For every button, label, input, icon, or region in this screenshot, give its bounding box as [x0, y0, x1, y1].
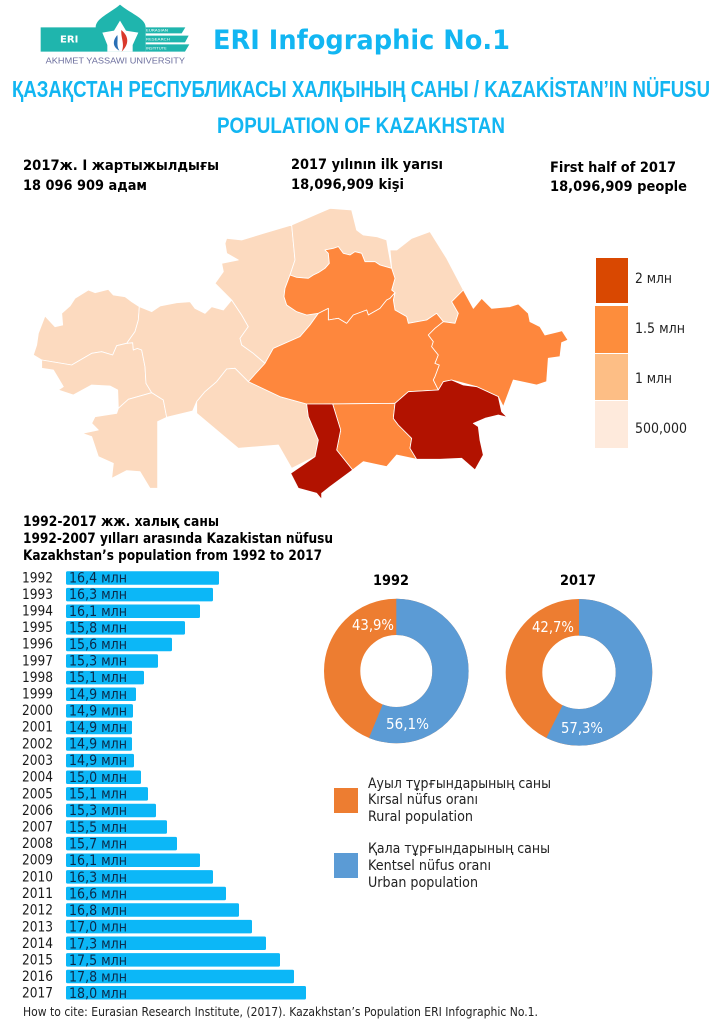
- bar 1994: [22, 604, 200, 620]
- region: Karaganda: [248, 293, 443, 404]
- donut chart: 2017: 57,3%: [561, 719, 603, 737]
- region: Kostanay: [215, 225, 318, 363]
- bar 1997: 15,3 млн: [69, 654, 127, 670]
- text block: Kazakh population: [23, 158, 219, 194]
- region: West Kazakhstan: [33, 289, 139, 365]
- bar 2010: 16,3 млн: [69, 870, 127, 886]
- bar 2008: 2008: [22, 836, 53, 852]
- region: Akmola: [284, 247, 395, 323]
- bar 2007: 15,5 млн: [69, 820, 127, 836]
- bar 2014: 2014: [22, 936, 53, 952]
- bar chart heading: 1992-2017 жж. халық саны: [23, 514, 219, 530]
- bar 2005: 15,1 млн: [69, 787, 127, 803]
- bar 2003: 14,9 млн: [69, 753, 127, 769]
- legend: 1.5 million: 1.5 млн: [635, 321, 685, 337]
- text block: Turkish population: 2017 yılının ilk yarısı: [291, 157, 443, 173]
- donut chart: 1992: 43,9%: [352, 616, 394, 634]
- donut chart: 1992: 1992: [373, 573, 409, 589]
- bar 2012: [22, 903, 239, 919]
- bar 2017: 2017: [22, 986, 53, 1002]
- logo: Eurasian Research Institute: [41, 5, 189, 65]
- region: Atyrau: [42, 343, 152, 408]
- bar 1993: [22, 587, 213, 603]
- bar 2012: 16,8 млн: [69, 903, 127, 919]
- region: Aktobe: [127, 300, 265, 417]
- bar 1999: 14,9 млн: [69, 687, 127, 703]
- bar 1994: 1994: [22, 604, 53, 620]
- bar 2017: 18,0 млн: [69, 986, 127, 1002]
- legend: urban population: Қала тұрғындарының саны: [368, 841, 550, 857]
- text block: English population: First half of 2017: [550, 160, 676, 176]
- bar 2001: 14,9 млн: [69, 720, 127, 736]
- bar chart heading: 1992-2007 yılları arasında Kazakistan nüfusu: [23, 531, 333, 547]
- bar 2000: [22, 703, 133, 719]
- legend: rural population: Rural population: [368, 809, 473, 825]
- region: Zhambyl: [333, 403, 417, 470]
- legend: rural population: Ауыл тұрғындарының саны: [368, 776, 551, 792]
- bar 1992: [22, 570, 219, 587]
- bar chart: population by year: [22, 570, 306, 1002]
- bar 2002: 14,9 млн: [69, 737, 127, 753]
- bar 2000: 2000: [22, 703, 53, 719]
- bar 1995: [22, 620, 185, 636]
- bar 2005: 2005: [22, 786, 53, 802]
- bar 1995: 1995: [22, 620, 53, 636]
- bar 2010: [22, 870, 213, 886]
- bar 2002: [22, 736, 132, 753]
- bar 2015: 2015: [22, 953, 53, 969]
- donut chart: 2017: [524, 573, 634, 737]
- logo: Eurasian Research Institute: EURASIAN: [146, 29, 169, 33]
- legend: 2 million: [596, 258, 672, 303]
- bar chart heading: [23, 514, 333, 564]
- region: East Kazakhstan: [428, 290, 568, 407]
- bar 2005: [22, 786, 148, 803]
- bar 2008: 15,7 млн: [69, 836, 127, 852]
- logo: Eurasian Research Institute: AKHMET YASSAWI UNIVERSITY: [46, 55, 185, 65]
- donut chart: 1992: [342, 573, 450, 733]
- bar 2004: 2004: [22, 770, 53, 786]
- bar 2006: 15,3 млн: [69, 803, 127, 819]
- text block: Turkish population: [291, 157, 443, 193]
- region: Pavlodar: [390, 232, 463, 323]
- bar 2007: 2007: [22, 820, 53, 836]
- logo: Eurasian Research Institute: ERI: [60, 35, 78, 46]
- title: ERI Infographic No.1: [213, 25, 510, 56]
- bar 1997: 1997: [22, 653, 53, 669]
- bar 1992: 1992: [22, 570, 53, 586]
- region: Almaty: [393, 380, 507, 470]
- region: Mangystau: [82, 393, 167, 488]
- bar 2016: [22, 969, 294, 986]
- bar 1998: 15,1 млн: [69, 670, 127, 686]
- logo: Eurasian Research Institute: RESEARCH: [146, 38, 171, 42]
- bar chart heading: Kazakhstan’s population from 1992 to 2017: [23, 548, 322, 564]
- citation footer: How to cite: Eurasian Research Institute, (2017). Kazakhstan’s Population ERI Infographic No.1.: [23, 1005, 538, 1019]
- bar 2015: [22, 953, 280, 969]
- bar 2001: 2001: [22, 720, 53, 736]
- bar 2002: 2002: [22, 736, 53, 752]
- legend: urban population: Kentsel nüfus oranı: [368, 858, 491, 874]
- region: South Kazakhstan: [291, 404, 353, 499]
- legend: 500,000: [595, 401, 687, 448]
- text block: Kazakh population: 2017ж. I жартыжылдығы: [23, 158, 219, 174]
- bar 2011: 2011: [22, 886, 53, 902]
- donut chart: 2017: 42,7%: [532, 618, 574, 636]
- text block: Turkish population: 18,096,909 kişi: [291, 177, 404, 193]
- bar 1999: 1999: [22, 686, 53, 702]
- text block: English population: 18,096,909 people: [550, 179, 687, 195]
- donut chart: 2017: 2017: [560, 573, 596, 589]
- legend: urban population: [334, 841, 550, 891]
- legend: 2 million: 2 млн: [635, 271, 672, 287]
- bar 1996: 15,6 млн: [69, 637, 127, 653]
- bar 1996: [22, 637, 172, 653]
- bar 2003: 2003: [22, 753, 53, 769]
- legend: 500,000: 500,000: [635, 421, 687, 437]
- choropleth map of Kazakhstan: [33, 208, 568, 499]
- bar 2006: 2006: [22, 803, 53, 819]
- bar 2014: 17,3 млн: [69, 936, 127, 952]
- bar 1999: [22, 686, 136, 703]
- bar 2008: [22, 836, 177, 852]
- bar 2000: 14,9 млн: [69, 703, 127, 719]
- bar 2013: 2013: [22, 919, 53, 935]
- legend: 1 million: 1 млн: [635, 371, 672, 387]
- bar 2011: 16,6 млн: [69, 886, 127, 902]
- bar 1993: 1993: [22, 587, 53, 603]
- bar 2009: 2009: [22, 853, 53, 869]
- map legend: [595, 258, 687, 448]
- logo: Eurasian Research Institute: INSTITUTE: [146, 47, 167, 51]
- bar 2001: [22, 720, 132, 736]
- legend: 1 million: [595, 354, 672, 400]
- bar 2017: [22, 986, 306, 1002]
- bar 2007: [22, 820, 167, 836]
- bar 1997: [22, 653, 158, 670]
- bar 2011: [22, 886, 226, 902]
- bar 2003: [22, 753, 134, 769]
- region: North Kazakhstan: [290, 208, 392, 278]
- bar 2006: [22, 803, 156, 819]
- bar 1994: 16,1 млн: [69, 604, 127, 620]
- bar 2013: 17,0 млн: [69, 920, 127, 936]
- bar 2014: [22, 936, 266, 952]
- legend: 1.5 million: [595, 306, 685, 353]
- bar 1996: 1996: [22, 637, 53, 653]
- bar 1998: 1998: [22, 670, 53, 686]
- bar 1992: 16,4 млн: [69, 571, 127, 587]
- bar 2015: 17,5 млн: [69, 953, 127, 969]
- bar 2016: 2016: [22, 969, 53, 985]
- bar 2016: 17,8 млн: [69, 970, 127, 986]
- donut chart: 1992: 56,1%: [386, 715, 429, 733]
- region: Kyzylorda: [197, 368, 318, 468]
- bar 2010: 2010: [22, 870, 53, 886]
- text block: English population: [550, 160, 687, 195]
- text block: Kazakh population: 18 096 909 адам: [23, 178, 147, 194]
- bar 2012: 2012: [22, 903, 53, 919]
- bar 2004: [22, 770, 141, 786]
- legend: urban population: Urban population: [368, 875, 478, 891]
- bar 2013: [22, 919, 252, 936]
- bar 1995: 15,8 млн: [69, 620, 127, 636]
- bar 2009: [22, 853, 200, 869]
- bar 1998: [22, 670, 144, 686]
- heading: English: POPULATION OF KAZAKHSTAN: [217, 113, 505, 138]
- bar 2004: 15,0 млн: [69, 770, 127, 786]
- bar 2009: 16,1 млн: [69, 853, 127, 869]
- legend: rural population: [334, 776, 551, 825]
- legend: rural population: Kırsal nüfus oranı: [368, 792, 478, 808]
- bar 1993: 16,3 млн: [69, 587, 127, 603]
